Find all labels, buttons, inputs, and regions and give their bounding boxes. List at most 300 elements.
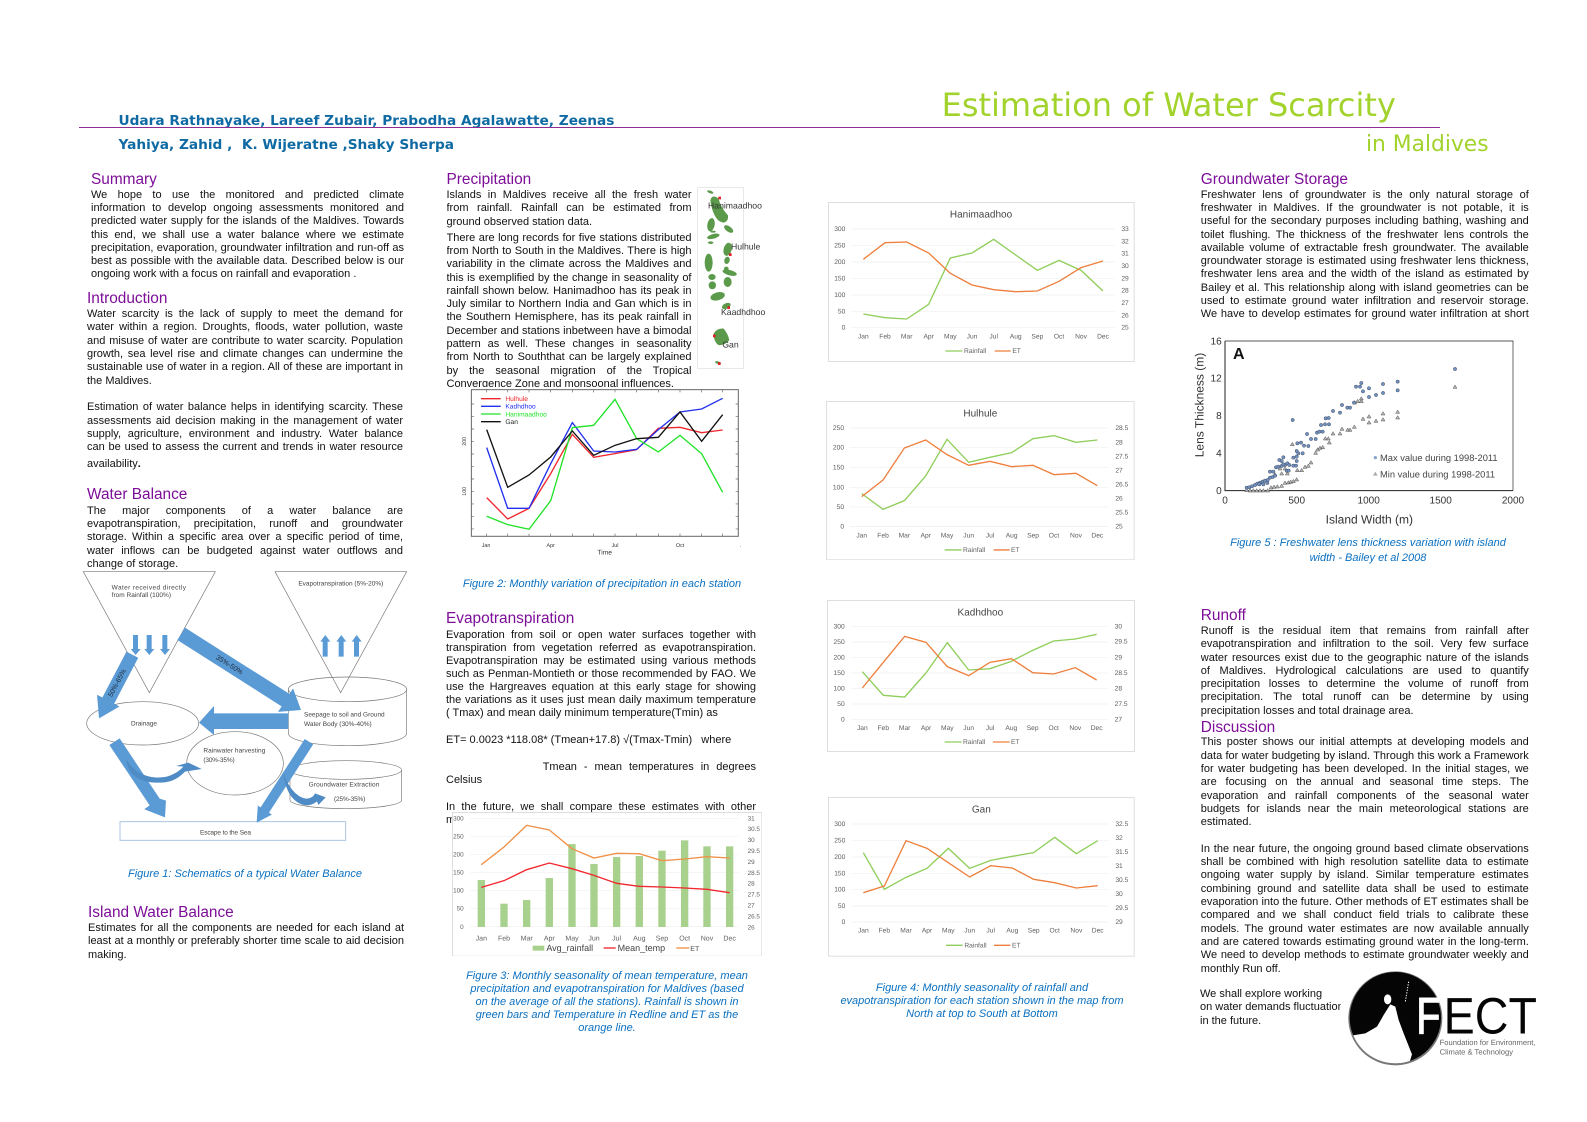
rainfall triangle: Water received directly [112, 584, 186, 591]
months: Jul [987, 927, 995, 935]
left axis: 250 [834, 639, 845, 646]
left axis: 150 [835, 275, 846, 282]
Hulhule line [487, 427, 723, 519]
left axis: 50 [838, 701, 845, 708]
text: Summary: We hope to use the monitored and predicted climate [91, 189, 404, 201]
rainfall line [862, 435, 1098, 509]
axis titles [1192, 353, 1413, 526]
left axis: 50 [837, 503, 844, 510]
right axis: 27.5 [1116, 452, 1129, 460]
text: Precipitation stations: variability in the climate across the Maldives and [446, 258, 692, 270]
right axis: 29.5 [1116, 905, 1129, 912]
arrow: rainfall to drainage [97, 652, 138, 718]
text: Discussion: budgets for islands near the main meteorological stations are [1201, 803, 1529, 815]
left axis: 50 [838, 903, 846, 910]
arrow: seepage to sea [257, 739, 313, 823]
text: Introduction: and misuse of water are contribute to water scarcity. Population [87, 335, 403, 347]
right axis: 30 [1115, 623, 1122, 630]
text: Runoff: of Maldives. Hydrological calculations are used to quantify [1201, 665, 1529, 677]
text: Water Balance: water inflows can be budgeted against water outflows and [87, 545, 403, 557]
legend: ET [690, 945, 699, 952]
left axis [835, 225, 846, 331]
months: Nov [1075, 332, 1087, 340]
text: Introduction: growth, sea level rise and climate changes can undermine the [87, 348, 403, 360]
left axis: 100 [835, 291, 846, 298]
right axis: 31.5 [1116, 849, 1129, 856]
text: Evapotranspiration: Evapotranspiration may be estimated using various methods [446, 655, 756, 667]
tick labels: 1000 [1358, 495, 1380, 506]
axis labels [462, 437, 741, 556]
months: Apr [924, 332, 934, 340]
arrow: drainage to sea [109, 738, 166, 817]
max value dots [1245, 367, 1457, 489]
tick labels: 0 [1216, 485, 1222, 496]
tick labels: 4 [1216, 448, 1222, 459]
right axis labels: 27 [747, 902, 754, 909]
text: Runoff: evapotranspiration and infiltration to the soil. Very few surface [1201, 638, 1529, 650]
authors line 1: Udara Rathnayake, Lareef Zubair, Prabodha Agalawatte, Zeenas [118, 113, 614, 129]
months: Apr [921, 725, 932, 732]
months: Oct [1054, 332, 1065, 340]
mean temperature line [481, 863, 729, 892]
heading: Water Balance: Water Balance [87, 486, 187, 503]
evapotranspiration triangle [275, 572, 407, 693]
months: Jan [857, 531, 867, 539]
rainfall line [863, 635, 1097, 697]
text: Discussion [1201, 736, 1529, 828]
month labels: Nov [700, 934, 713, 942]
right axis [1122, 225, 1129, 331]
rainwater harvesting ellipse: Rainwater harvesting [203, 747, 265, 754]
right axis labels: 26.5 [747, 913, 760, 920]
months: Jan [857, 725, 868, 732]
seepage cylinder [288, 677, 407, 746]
logo tagline [1439, 1038, 1535, 1056]
text: Runoff: precipitation losses to determine the volume of runoff from [1201, 678, 1529, 690]
left axis: 0 [842, 919, 846, 926]
text: Island Water Balance: Estimates for all the components are needed for each island at [88, 922, 404, 934]
text: Runoff: precipitation losses and total drainage area. [1201, 705, 1414, 717]
left axis: 250 [835, 242, 846, 249]
arrow: seepage to drainage [199, 706, 288, 735]
text: Discussion: data for water budgeting by island. Through this work a Framework [1201, 750, 1529, 762]
text: Groundwater Storage: toilet flushing. The thickness of the freshwater lens controls the [1201, 229, 1529, 241]
legend: ET [1011, 739, 1020, 746]
logo letters: F [1416, 987, 1440, 1044]
text: Groundwater Storage: used to estimate ground water infiltration and reservoir storage. [1201, 295, 1529, 307]
text: water balance and scarcity: assessments aid decision making in the management of water [87, 415, 403, 427]
text: Runoff: precipitation. The total runoff can be determine by using [1201, 691, 1529, 703]
right axis: 28 [1122, 287, 1129, 294]
right axis: 29.5 [1115, 638, 1128, 646]
months: Oct [1050, 927, 1060, 935]
heading: Island Water Balance: Island Water Balance [88, 904, 234, 921]
poster subtitle: in Maldives [1366, 132, 1489, 157]
months: Nov [1071, 927, 1083, 935]
left axis labels: 200 [453, 851, 463, 858]
text: Precipitation stations: from North to South in the Maldives. There is high [446, 245, 692, 257]
months: Jul [986, 725, 995, 732]
right axis labels: 29.5 [747, 847, 760, 854]
months: Aug [1010, 332, 1022, 340]
axis labels: Jul [612, 542, 618, 548]
caption: figure 3: orange line. [578, 1022, 636, 1034]
months: Oct [1049, 531, 1060, 539]
text: Summary [91, 189, 404, 280]
right axis labels [747, 815, 760, 931]
months: Aug [1006, 725, 1018, 732]
figure 2: monthly precipitation line chart [462, 387, 741, 556]
right axis: 28 [1115, 685, 1122, 692]
text: water demands: We shall explore working [1200, 988, 1322, 1000]
right axis: 31 [1122, 250, 1129, 257]
legend: Rainfall [965, 942, 987, 949]
right axis: 29 [1115, 654, 1122, 661]
right axis: 26 [1116, 495, 1123, 502]
right axis: 25 [1116, 523, 1123, 530]
left axis: 100 [835, 886, 846, 893]
text: Summary: ongoing work with a focus on rainfall and evaporation . [91, 268, 356, 280]
drainage ellipse: Drainage [131, 720, 157, 727]
ET line [864, 841, 1098, 893]
text: Introduction: sustainable use of water in a region. All of these are important in [87, 361, 403, 373]
arrow: rainfall to seepage [177, 628, 301, 712]
legend [945, 546, 1020, 553]
text: Precipitation intro: from rainfall. Rainfall can be estimated from [446, 202, 692, 214]
legend [532, 943, 699, 953]
month labels: May [565, 934, 578, 942]
chart: Hanimaadhoo [828, 202, 1135, 362]
right axis: 32 [1116, 835, 1123, 842]
text: Summary: information to develop ongoing assessments monitored and [91, 202, 404, 214]
left axis: 0 [842, 324, 846, 331]
left axis: 100 [833, 483, 844, 491]
text: Introduction: the Maldives. [87, 375, 152, 387]
axis labels: 200 [462, 437, 467, 445]
heading: Summary: Summary [91, 171, 157, 188]
text: Evapotranspiration: use the Hargreaves equation at this early stage for showing [446, 681, 756, 693]
station markers [713, 196, 731, 365]
text: Evapotranspiration: the variations as it uses just mean daily maximum temperature [446, 694, 756, 706]
heading: Discussion: Discussion [1201, 719, 1275, 736]
month labels: Dec [723, 934, 736, 942]
month labels [475, 934, 736, 942]
legend [946, 347, 1021, 354]
right axis: 32.5 [1116, 821, 1129, 828]
text: availability: availability. [87, 458, 141, 470]
station labels: Kaadhdhoo [721, 307, 765, 317]
text: near future: shall be combined with high resolution satellite data to estimate [1201, 856, 1529, 868]
evapotranspiration triangle: Evapotranspiration (5%-20%) [298, 580, 383, 587]
months: Aug [1006, 531, 1018, 539]
legend: ET [1011, 546, 1020, 553]
left axis: 100 [834, 685, 845, 692]
chart title: Hanimaadhoo [950, 209, 1012, 220]
axis labels: 100 [462, 487, 467, 495]
caption: figure 3 [466, 970, 748, 1034]
left axis: 200 [833, 444, 844, 451]
axis labels: . [740, 542, 741, 548]
heading: Precipitation: Precipitation [446, 171, 531, 188]
caption: figure 1: Figure 1: Schematics of a typical Water Balance [128, 868, 362, 880]
legend [946, 942, 1021, 949]
months: Oct [1049, 725, 1059, 732]
text: near future: compared and we shall conduct field trials to calibrate these [1201, 909, 1529, 921]
caption: figure 4: Figure 4: Monthly seasonality of rainfall and [876, 982, 1088, 994]
months: Jun [965, 927, 975, 935]
plot frame [1225, 341, 1513, 491]
month labels: Oct [679, 934, 690, 942]
station labels [708, 200, 765, 349]
text: Summary: predicted water supply for the islands of the Maldives. Towards [91, 215, 404, 227]
caption: figure 3: Figure 3: Monthly seasonality of mean temperature, mean [466, 970, 748, 982]
text: Island Water Balance [88, 922, 404, 961]
seepage cylinder: Seepage to soil and Ground [304, 711, 385, 718]
months: May [941, 531, 954, 539]
caption: figure 4 [840, 982, 1124, 1020]
text: Groundwater Storage: groundwater storage is estimated using freshwater lens thickness, [1201, 255, 1529, 267]
chart title: Hulhule [964, 407, 998, 418]
axis titles: Lens Thickness (m) [1192, 353, 1206, 457]
text: water balance and scarcity: supply, agriculture, environment and industry. Water balance [87, 428, 403, 440]
curved arrow: to groundwater extraction [283, 771, 326, 805]
months: Feb [880, 332, 891, 340]
text: Groundwater Storage [1201, 189, 1529, 320]
rainwater harvesting ellipse [187, 732, 283, 795]
left axis: 200 [835, 854, 846, 861]
caption: figure 2: Figure 2: Monthly variation of precipitation in each station [463, 578, 741, 590]
scatter legend: Max value during 1998-2011 [1380, 453, 1498, 463]
right axis: 25 [1122, 324, 1129, 331]
months: May [944, 332, 957, 340]
left axis: 0 [841, 716, 845, 724]
text: Precipitation stations: pattern as well. These changes in seasonality [446, 338, 692, 350]
months: Apr [921, 531, 931, 539]
right axis [1115, 623, 1128, 724]
text: Runoff: water resources exist due to the geographic nature of the islands [1201, 652, 1529, 664]
text: future comparison [446, 801, 756, 826]
months: Sep [1027, 725, 1039, 732]
ET line [863, 637, 1097, 688]
legend: Kadhdhoo [505, 403, 536, 410]
escape to the sea box: Escape to the Sea [200, 829, 251, 836]
left axis: 300 [835, 821, 846, 828]
months: Feb [878, 531, 889, 539]
right axis: 26 [1122, 311, 1129, 319]
ET line [862, 440, 1098, 496]
logo globe [1347, 971, 1442, 1068]
right axis: 28.5 [1115, 670, 1128, 677]
caption: figure 4: evapotranspiration for each station shown in the map from [840, 995, 1124, 1007]
month labels: Mar [520, 934, 532, 942]
arrow: rainfall to seepage: 35%-50% [215, 654, 244, 676]
tick labels: 2000 [1502, 495, 1524, 506]
left axis: 0 [841, 523, 844, 530]
caption: figure 3: precipitation and evapotranspiration for Maldives (based [470, 983, 744, 995]
equation: ET= 0.0023 *118.08* (Tmean+17.8) √(Tmax-Tmin) where [446, 734, 731, 746]
legend: Gan [505, 418, 518, 425]
months [857, 531, 1104, 539]
text: Tmean definition: Tmean - mean temperatures in degrees [543, 761, 756, 773]
months: Mar [899, 531, 911, 539]
text: Groundwater Storage: useful for the secondary purposes including bathing, washing and [1201, 215, 1529, 227]
station labels: Hulhule [731, 241, 760, 251]
left axis labels: 100 [453, 887, 463, 894]
left axis: 150 [835, 870, 846, 877]
right axis: 29 [1122, 274, 1129, 282]
text: Discussion: This poster shows our initial attempts at developing models and [1201, 736, 1529, 748]
months: Dec [1092, 531, 1104, 539]
logo tagline: Foundation for Environment, [1439, 1038, 1535, 1047]
text: Evapotranspiration: Evaporation from soil or open water surfaces together with [446, 629, 756, 641]
text: Precipitation intro [446, 189, 692, 228]
caption: figure 5 [1230, 537, 1506, 564]
tick labels: 0 [1222, 495, 1228, 506]
chart title: Gan [972, 804, 991, 815]
text: Precipitation stations: by the seasonal migration of the Tropical [446, 365, 692, 377]
months: Feb [879, 927, 890, 935]
text: near future: evaporation into the future. Other methods of ET estimates shall be [1201, 896, 1529, 908]
left axis labels: 250 [453, 833, 463, 840]
text: water balance and scarcity: Estimation of water balance helps in identifying scarcity. These [87, 401, 403, 413]
chart title: Kadhdhoo [958, 607, 1003, 618]
text: Precipitation stations: December and stations inbetween have a bimodal [446, 325, 692, 337]
rainfall line [864, 838, 1098, 890]
months: May [942, 927, 955, 935]
left axis: 150 [833, 464, 844, 471]
FECT logo [1348, 971, 1537, 1066]
rainwater harvesting ellipse: (30%-35%) [203, 756, 235, 764]
text: Island Water Balance: least at a monthly or preferably shorter time scale to aid decision [88, 935, 404, 947]
heading: Groundwater Storage: Groundwater Storage [1201, 171, 1348, 188]
month labels: Apr [544, 934, 554, 942]
legend: Rainfall [964, 347, 987, 354]
text: near future: In the near future, the ongoing ground based climate observations [1201, 843, 1529, 855]
months: Mar [901, 332, 913, 340]
months [858, 332, 1109, 340]
logo tagline: Climate & Technology [1439, 1047, 1513, 1056]
station labels: Hanimaadhoo [708, 200, 762, 210]
left axis: 150 [834, 670, 845, 677]
text: future comparison: methods [446, 814, 488, 826]
right axis: 30 [1116, 891, 1123, 898]
tick labels: 8 [1216, 410, 1222, 421]
text: near future: and are catered towards estimating ground water in the long-term. [1201, 936, 1529, 948]
axis labels: Jan [482, 542, 490, 548]
rainfall bars [477, 840, 733, 927]
tick labels: 16 [1211, 336, 1222, 347]
text: Celsius: Celsius [446, 774, 482, 786]
caption: figure 3: on the average of all the stations). Rainfall is shown in [476, 996, 738, 1008]
right axis: 27.5 [1115, 701, 1128, 708]
text: Discussion: are focusing on the annual and seasonal time steps. The [1201, 776, 1529, 788]
text: Precipitation stations: July similar to Northern India and Gan which is in [446, 298, 692, 310]
ET line [481, 825, 729, 864]
left axis [835, 821, 846, 926]
tick labels: 12 [1211, 373, 1222, 384]
months: Sep [1027, 531, 1039, 539]
right axis labels: 30 [747, 836, 754, 843]
text: Groundwater Storage: Bailey et al. This relationship along with island geometries can be [1201, 282, 1529, 294]
months: Jul [990, 332, 998, 340]
text: Precipitation stations: rainfall shown below. Hanimadhoo has its peak in [446, 285, 692, 297]
months: Nov [1070, 531, 1082, 539]
ET line [864, 242, 1103, 291]
text: Discussion: estimated. [1201, 816, 1252, 828]
rainfall triangle [83, 572, 215, 693]
text: near future: ongoing water supply by island. Similar temperature estimates [1201, 869, 1529, 881]
text: Introduction: water within a region. Droughts, floods, water pollution, waste [87, 321, 403, 333]
chart: Hulhule [826, 401, 1135, 560]
right axis [1116, 821, 1129, 926]
left axis: 200 [834, 654, 845, 661]
text: Precipitation intro: Islands in Maldives receive all the fresh water [446, 189, 692, 201]
drainage ellipse [87, 702, 199, 745]
Kadhdhoo line [487, 398, 723, 508]
right axis: 27 [1116, 466, 1123, 474]
text: Water Balance: change of storage. [87, 558, 178, 570]
right axis labels: 29 [747, 858, 754, 865]
groundwater extraction cylinder [290, 761, 402, 809]
text: future comparison: In the future, we shall compare these estimates with other [446, 801, 756, 813]
month labels: Jan [475, 934, 487, 942]
right axis: 32 [1122, 237, 1129, 245]
text: water balance and scarcity [87, 401, 403, 453]
months: Jun [967, 332, 978, 340]
text: Water Balance: The major components of a water balance are [87, 505, 403, 517]
axis labels: Time [597, 548, 612, 556]
text: Groundwater Storage: freshwater lens area and the width of the island as estimated by [1201, 268, 1529, 280]
caption: figure 4: North at top to South at Bottom [906, 1008, 1058, 1020]
right axis: 26.5 [1116, 481, 1129, 488]
rainfall triangle: from Rainfall (100%) [112, 591, 171, 599]
months: Dec [1091, 725, 1103, 732]
months: Apr [922, 927, 933, 935]
escape to the sea box [120, 822, 346, 840]
caption: figure 3: green bars and Temperature in Redline and ET as the [476, 1009, 738, 1021]
heading: Evapotranspiration: Evapotranspiration [446, 610, 574, 627]
text: Evapotranspiration: ( Tmax) and mean daily minimum temperature(Tmin) as [446, 707, 718, 719]
min value triangles [1245, 385, 1457, 492]
month labels: Jun [588, 934, 599, 942]
left axis: 250 [835, 837, 846, 845]
evaporation up arrows [320, 635, 362, 657]
left axis [834, 623, 845, 724]
right axis: 29 [1116, 919, 1123, 926]
text: near future: We need to develop methods to estimate groundwater weekly and [1201, 949, 1529, 961]
text: near future [1201, 843, 1529, 975]
groundwater extraction cylinder: (25%-35%) [334, 795, 365, 803]
text: Summary: best as possible with the available data. Described below is our [91, 255, 404, 267]
heading: Runoff: Runoff [1201, 607, 1246, 624]
legend: Rainfall [963, 546, 986, 553]
legend: Mean_temp [617, 943, 665, 953]
left axis: 300 [835, 225, 846, 232]
text: Runoff: Runoff is the residual item that remains from rainfall after [1201, 625, 1529, 637]
text: Evapotranspiration [446, 629, 756, 719]
month labels: Feb [498, 934, 510, 942]
Gan line [487, 412, 723, 487]
text: water balance and scarcity: can be used to assess the current and trends in water resource [87, 441, 403, 453]
left axis: 300 [834, 623, 845, 630]
text: water demands: in the future. [1200, 1015, 1261, 1027]
figure 1: water balance schematic [82, 571, 408, 841]
chart: Kadhdhoo [827, 600, 1135, 752]
left axis: 200 [835, 258, 846, 265]
authors line 2: Yahiya, Zahid , K. Wijeratne ,Shaky Sherpa [118, 137, 454, 153]
text: Water Balance [87, 505, 403, 570]
months: Jan [858, 332, 869, 340]
